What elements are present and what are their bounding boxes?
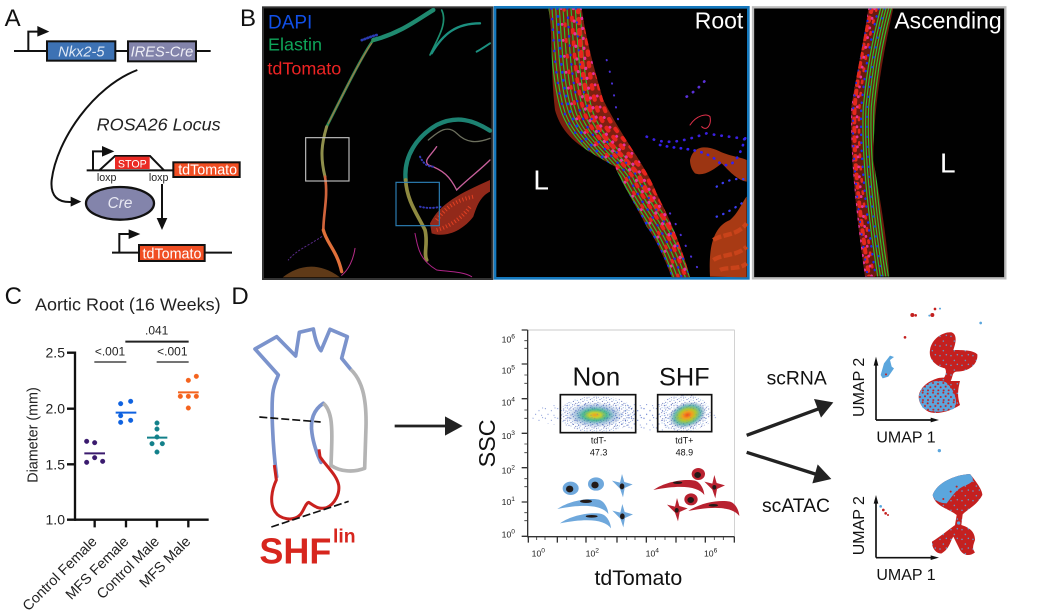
population labels: Non xyxy=(572,361,620,391)
blue non-SHF cells xyxy=(557,474,633,528)
floxed stop construct: tdTomato xyxy=(178,163,237,179)
x axis labels: MFS Male xyxy=(137,534,194,591)
scRNA UMAP xyxy=(851,308,982,452)
dashed cut lines xyxy=(259,417,349,527)
events scatter xyxy=(530,395,717,433)
x tick labels: 2 xyxy=(595,548,599,555)
Cre ellipse: Cre xyxy=(108,195,132,212)
y tick labels: 10 xyxy=(502,398,511,408)
clusters bottom xyxy=(879,474,982,555)
x tick labels: 6 xyxy=(714,548,718,555)
UMAP axes bottom xyxy=(851,495,939,584)
scATAC label: scATAC xyxy=(762,496,830,517)
significance brackets: <.001 xyxy=(157,344,188,358)
y tick labels: 10 xyxy=(502,529,511,539)
panel B: root micrograph xyxy=(495,4,748,278)
panel B: ascending micrograph xyxy=(753,7,1005,278)
x tick labels: 10 xyxy=(646,549,655,559)
significance brackets: <.001 xyxy=(95,344,125,358)
x axis labels: Control Male xyxy=(94,534,163,603)
y tick labels: 10 xyxy=(502,365,511,375)
channel legend: Elastin xyxy=(268,35,322,55)
UMAP axes top: UMAP 1 xyxy=(876,429,936,446)
root label: Root xyxy=(695,8,744,34)
root aortic wall xyxy=(548,8,690,278)
x tick labels xyxy=(532,548,718,559)
axis titles: SSC xyxy=(474,419,500,467)
inset boxes xyxy=(306,138,439,226)
panel D: aorta schematic xyxy=(231,283,463,571)
recombined tdTomato construct: tdTomato xyxy=(143,246,201,262)
channel legend xyxy=(267,12,341,79)
UMAP axes bottom: UMAP 1 xyxy=(876,567,936,584)
population labels: 48.9 xyxy=(676,447,693,457)
panel letter A: A xyxy=(5,5,21,32)
panel letter D: D xyxy=(231,283,249,310)
y tick labels: 1 xyxy=(511,496,515,503)
recombined tdTomato construct xyxy=(112,229,232,262)
y tick labels: 10 xyxy=(502,466,511,476)
UMAP axes top xyxy=(851,357,939,446)
Nkx2-5 IRES-Cre construct: IRES-Cre xyxy=(131,44,193,60)
plot frame and ticks xyxy=(522,330,734,543)
blue aortic outline xyxy=(255,329,351,477)
x tick labels: 10 xyxy=(586,549,595,559)
scRNA label: scRNA xyxy=(767,368,827,389)
branch arrow scATAC xyxy=(747,452,831,483)
panel C: aortic root scatter plot xyxy=(5,283,221,614)
y tick labels: 10 xyxy=(502,431,511,441)
population labels: SHF xyxy=(659,363,710,391)
population labels xyxy=(572,361,710,457)
lumen label ascending: L xyxy=(940,148,956,179)
y axis labels xyxy=(46,345,65,528)
sequencing branch and UMAPs xyxy=(747,308,982,584)
population labels: 47.3 xyxy=(590,447,607,457)
ascending label: Ascending xyxy=(894,8,1002,34)
x axis labels: Control Female xyxy=(20,534,101,614)
UMAP axes bottom: UMAP 2 xyxy=(851,496,868,555)
MFS female points xyxy=(116,399,136,425)
scATAC UMAP xyxy=(851,474,982,584)
branch arrow scRNA xyxy=(747,399,833,435)
floxed stop construct: loxp xyxy=(149,172,169,184)
curved arrow to Cre xyxy=(51,70,137,207)
Nkx2-5 IRES-Cre construct: Nkx2-5 xyxy=(58,44,105,60)
y tick labels: 3 xyxy=(511,430,515,437)
y axis labels: 2.5 xyxy=(46,345,65,361)
gates xyxy=(560,395,712,433)
axes xyxy=(67,353,209,527)
aorta strands xyxy=(288,10,490,277)
y axis labels: 1.0 xyxy=(46,512,65,528)
panel letter C: C xyxy=(5,283,22,310)
arrow to flow plot xyxy=(395,416,463,436)
floxed stop construct xyxy=(87,146,240,184)
floxed stop construct: loxp xyxy=(97,172,117,184)
y tick labels: 4 xyxy=(511,397,515,404)
Nkx2-5 IRES-Cre construct xyxy=(14,26,211,61)
grey descending outline xyxy=(323,369,366,471)
x tick labels: 4 xyxy=(655,548,659,555)
panel B: overview micrograph xyxy=(263,7,492,279)
lumen label root: L xyxy=(533,164,549,195)
y axis title: Diameter (mm) xyxy=(26,387,42,483)
control male points xyxy=(147,421,167,454)
floxed stop construct: STOP xyxy=(118,158,147,170)
channel legend: DAPI xyxy=(268,12,312,33)
y tick labels: 6 xyxy=(511,334,515,341)
y axis labels: 2.0 xyxy=(46,401,65,417)
root tissue xyxy=(430,180,490,235)
significance brackets xyxy=(94,323,189,362)
x tick labels: 10 xyxy=(704,549,714,559)
red SHF cells xyxy=(653,468,739,521)
myocardium at right xyxy=(607,60,747,277)
y tick labels: 5 xyxy=(511,364,515,371)
x tick labels: 10 xyxy=(532,549,541,559)
panel letter B: B xyxy=(240,5,256,32)
y tick labels: 10 xyxy=(502,335,511,345)
channel legend: tdTomato xyxy=(267,59,341,79)
SHF lineage label: lin xyxy=(333,527,356,548)
population labels: tdT- xyxy=(591,436,606,446)
y tick labels: 10 xyxy=(502,497,511,507)
recombination arrow xyxy=(157,184,167,230)
x axis labels xyxy=(20,534,194,614)
population labels: tdT+ xyxy=(675,436,693,446)
red root outline xyxy=(272,449,339,519)
flow cytometry plot xyxy=(474,330,739,590)
y tick labels xyxy=(502,334,515,539)
y axis labels: 1.5 xyxy=(46,456,65,472)
y tick labels: 0 xyxy=(511,528,515,535)
control female points xyxy=(84,439,105,465)
UMAP axes top: UMAP 2 xyxy=(851,358,868,417)
SHF lineage label: SHF xyxy=(259,530,331,571)
ROSA26 label: ROSA26 Locus xyxy=(97,114,221,134)
MFS male points xyxy=(178,374,199,410)
clusters top xyxy=(881,308,982,452)
chart title: Aortic Root (16 Weeks) xyxy=(35,295,221,315)
x tick labels: 0 xyxy=(541,548,545,555)
ascending aortic wall xyxy=(851,8,894,277)
significance brackets: .041 xyxy=(145,323,169,337)
y tick labels: 2 xyxy=(511,465,515,472)
flow cytometry plot: tdTomato xyxy=(594,566,682,590)
x axis labels: MFS Female xyxy=(63,534,132,603)
Cre ellipse xyxy=(86,187,154,220)
panel A: genetic construct xyxy=(5,5,240,262)
